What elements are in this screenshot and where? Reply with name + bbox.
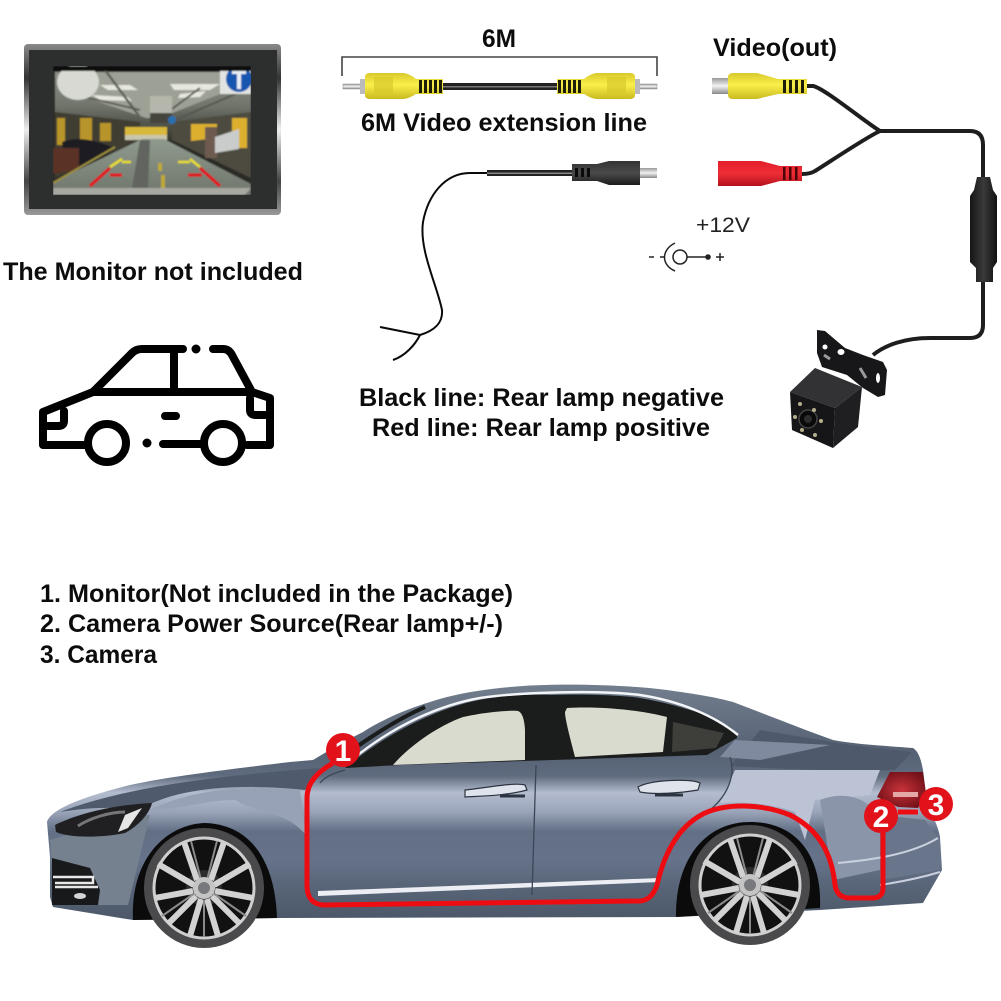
numbered legend: 3. Camera bbox=[40, 641, 158, 669]
power symbol +12V bbox=[649, 214, 750, 271]
hood shading bbox=[60, 768, 320, 812]
numbered legend bbox=[40, 580, 513, 669]
red wiring route bbox=[307, 763, 918, 905]
6M length label: 6M bbox=[482, 25, 516, 53]
headlight bbox=[55, 803, 152, 837]
wheel arches bbox=[133, 823, 277, 920]
window frame bbox=[345, 695, 737, 768]
front window glass bbox=[393, 711, 525, 765]
icon: car outline bbox=[43, 344, 270, 462]
badge 1 bbox=[326, 733, 360, 768]
yellow video socket bbox=[712, 73, 807, 99]
camera bbox=[790, 330, 887, 448]
label: red line: Red line: Rear lamp positive bbox=[372, 414, 710, 442]
monitor bbox=[24, 44, 281, 215]
camera harness cable bbox=[802, 86, 983, 355]
front grille and fog lamp bbox=[52, 858, 100, 905]
numbered legend: 2. Camera Power Source(Rear lamp+/-) bbox=[40, 610, 503, 638]
label: video out: Video(out) bbox=[713, 34, 837, 62]
label: monitor not included: The Monitor not included bbox=[3, 258, 303, 286]
badge 1: 1 bbox=[335, 735, 351, 768]
sedan illustration bbox=[47, 685, 942, 920]
extension cable bbox=[343, 73, 657, 99]
red power socket bbox=[718, 161, 802, 186]
right yellow plug bbox=[557, 73, 635, 99]
badge 3 bbox=[919, 787, 953, 822]
door seams and handles bbox=[320, 757, 732, 895]
left yellow plug bbox=[365, 73, 443, 99]
rear wheel bbox=[690, 825, 810, 945]
label: lamp wiring: Black line: Rear lamp negative bbox=[359, 384, 724, 412]
monitor screen parking view bbox=[53, 64, 252, 195]
badge 3: 3 bbox=[928, 789, 944, 822]
badge 2 bbox=[864, 799, 898, 834]
black lamp wire bbox=[380, 161, 657, 360]
front wheel bbox=[144, 828, 264, 948]
label: extension line: 6M Video extension line bbox=[361, 109, 647, 137]
dimension bracket bbox=[342, 57, 657, 76]
badge 2: 2 bbox=[873, 801, 889, 834]
numbered legend: 1. Monitor(Not included in the Package) bbox=[40, 580, 513, 608]
rear window glass bbox=[565, 707, 667, 757]
tail lamp bbox=[877, 772, 926, 808]
power symbol +12V: +12V bbox=[696, 214, 750, 237]
inline module bbox=[970, 177, 997, 282]
